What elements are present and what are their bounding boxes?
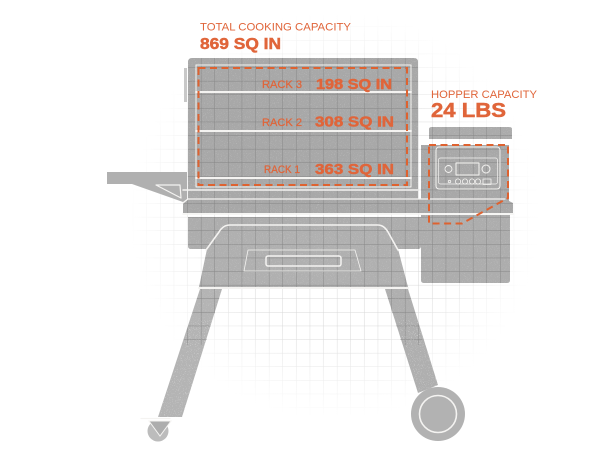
hopper band outline bbox=[421, 213, 513, 215]
value: 24 lbs: 24 LBS bbox=[431, 100, 506, 122]
shelf cut-out bbox=[156, 185, 181, 198]
label: rack 2 bbox=[262, 114, 394, 130]
leg texture bbox=[150, 320, 450, 420]
infographic: grill capacity diagram bbox=[107, 23, 537, 442]
grill illustration bbox=[100, 50, 520, 442]
label: rack 2: RACK 2 bbox=[262, 117, 302, 129]
firebox lower body bbox=[188, 217, 421, 249]
lower cabinet bbox=[421, 215, 510, 283]
label: rack 1: 363 SQ IN bbox=[315, 161, 394, 178]
background grid bbox=[149, 29, 521, 401]
wheel bbox=[411, 387, 465, 441]
label: rack 1 bbox=[264, 161, 394, 178]
chamber outlines and rack lines bbox=[183, 65, 505, 288]
cooking chamber lid bbox=[188, 58, 418, 199]
left leg bbox=[158, 289, 222, 417]
lid handle bracket bbox=[184, 68, 187, 102]
value: 869 sq in: 869 SQ IN bbox=[200, 36, 281, 53]
label: rack 3: RACK 3 bbox=[262, 79, 302, 91]
shelf band bbox=[183, 199, 513, 213]
dashed outline: cooking capacity bbox=[198, 68, 407, 185]
hopper body bbox=[421, 145, 509, 202]
hopper lid bbox=[429, 127, 512, 139]
title: total cooking capacity: TOTAL COOKING CAPACITY bbox=[200, 22, 352, 34]
title: hopper capacity: HOPPER CAPACITY bbox=[431, 89, 538, 101]
caster wheel bbox=[141, 418, 171, 442]
label: rack 3 bbox=[262, 76, 392, 93]
side shelf bbox=[107, 172, 187, 202]
cart arch and vent bbox=[206, 225, 398, 271]
dashed outline: hopper capacity bbox=[429, 145, 508, 224]
label: rack 3: 198 SQ IN bbox=[316, 76, 392, 93]
label: rack 1: RACK 1 bbox=[264, 164, 300, 176]
cart front panel bbox=[199, 225, 408, 287]
grill grid overlay bbox=[183, 58, 513, 345]
hopper control panel bbox=[436, 147, 500, 189]
label: rack 2: 308 SQ IN bbox=[315, 114, 394, 130]
right leg bbox=[385, 289, 438, 393]
